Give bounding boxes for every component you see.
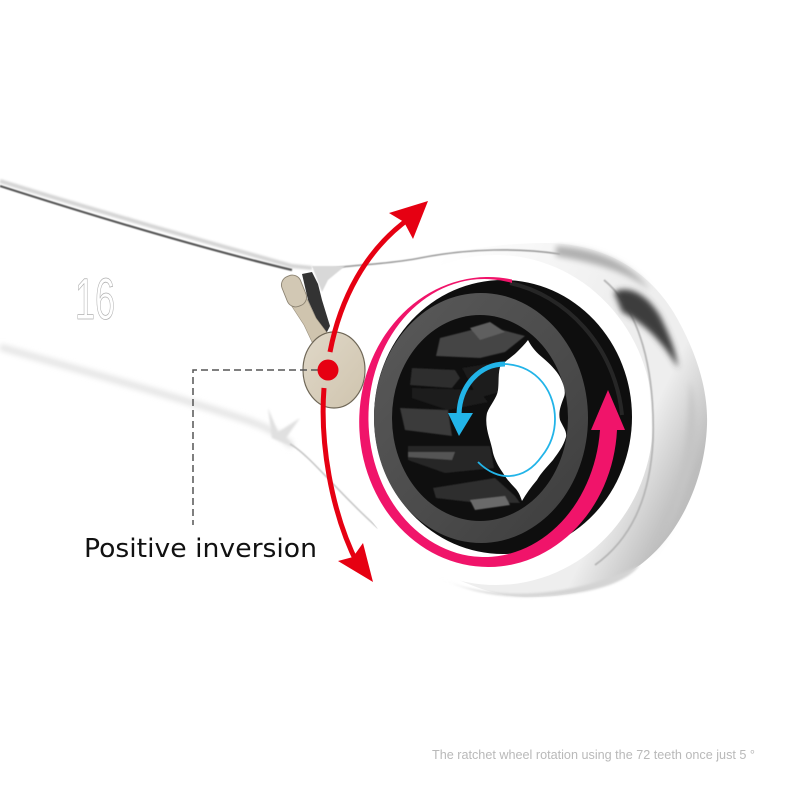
wrench head: [312, 243, 707, 597]
red double arrow: [318, 201, 428, 582]
dashed callout line: [193, 370, 318, 525]
ratchet gear ring: [374, 280, 632, 554]
caption: The ratchet wheel rotation using the 72 teeth once just 5 °: [432, 748, 755, 762]
head inner white band: [339, 255, 653, 585]
blue rotation arrow: [448, 364, 555, 476]
wrench opening: [486, 340, 566, 501]
size marking 16: 16: [75, 267, 115, 332]
pawl lever: [279, 272, 365, 408]
wrench handle: [0, 181, 378, 528]
label: Positive inversion: Positive inversion: [84, 534, 317, 564]
pink rotation arrow: [359, 277, 625, 567]
chrome highlight: [556, 246, 650, 290]
inner gear teeth: [400, 322, 525, 510]
